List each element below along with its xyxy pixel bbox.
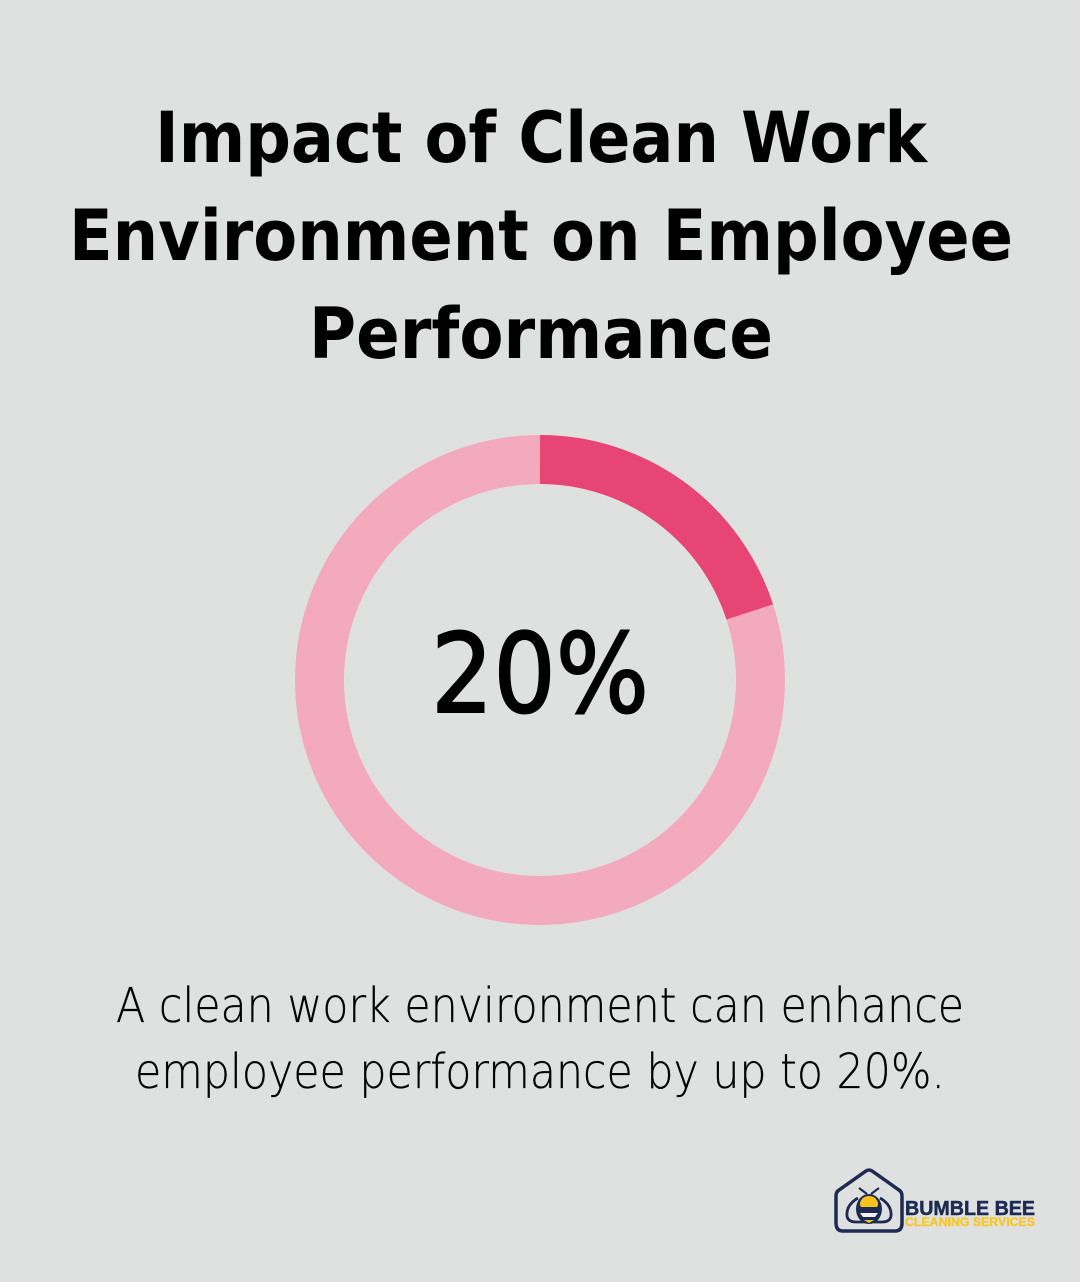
donut value: 20% xyxy=(431,610,649,738)
logo tagline: CLEANING SERVICES xyxy=(905,1215,1035,1229)
title: Environment on Employee xyxy=(69,195,1013,277)
icon: bee xyxy=(847,1188,891,1224)
logo: Bumble Bee Cleaning Services xyxy=(836,1170,1035,1231)
description: A clean work environment can enhance xyxy=(116,978,964,1034)
title: Impact of Clean Work xyxy=(155,97,928,179)
description xyxy=(116,978,964,1100)
title xyxy=(69,97,1013,375)
donut chart: 20% xyxy=(320,460,760,900)
logo wordmark: BUMBLE BEE xyxy=(905,1198,1035,1220)
description: employee performance by up to 20%. xyxy=(135,1044,945,1100)
icon: house outline xyxy=(836,1170,902,1231)
title: Performance xyxy=(309,293,773,375)
